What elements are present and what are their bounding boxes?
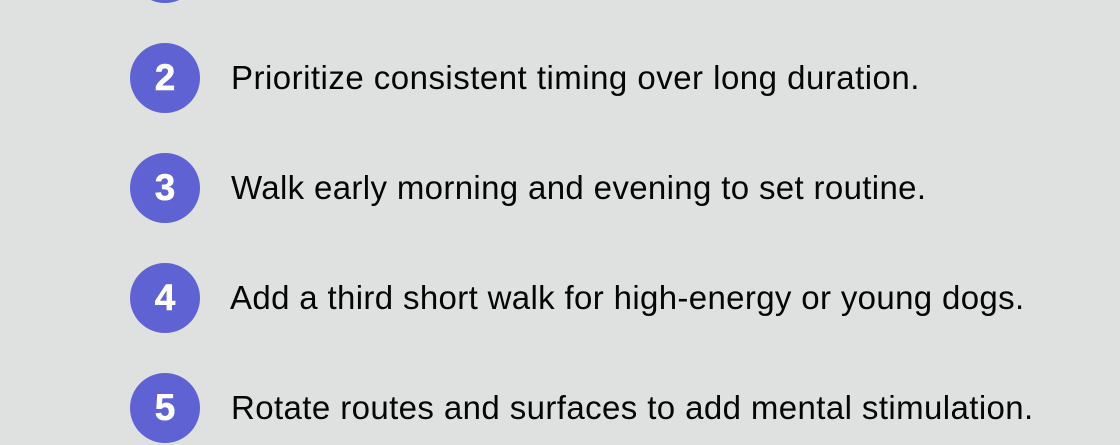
number badge 1, cropped by top edge xyxy=(130,0,200,3)
tip 2 text: Prioritize consistent timing over long duration. xyxy=(231,59,920,96)
tip 5 xyxy=(130,373,1034,443)
tip 4 xyxy=(130,263,1024,333)
badge 3 xyxy=(130,153,200,223)
tip 2 xyxy=(130,43,920,113)
badge 4: 4 xyxy=(155,277,175,318)
badge 5 xyxy=(130,373,200,443)
badge 2 xyxy=(130,43,200,113)
badge 5: 5 xyxy=(155,387,175,428)
badge 2: 2 xyxy=(155,57,175,98)
badge 4 xyxy=(130,263,200,333)
badge 3: 3 xyxy=(155,167,175,208)
tip 4 text: Add a third short walk for high-energy or young dogs. xyxy=(230,279,1024,316)
tip 3 text: Walk early morning and evening to set routine. xyxy=(231,169,926,206)
tip 3 xyxy=(130,153,926,223)
tip 5 text: Rotate routes and surfaces to add mental stimulation. xyxy=(231,389,1034,426)
